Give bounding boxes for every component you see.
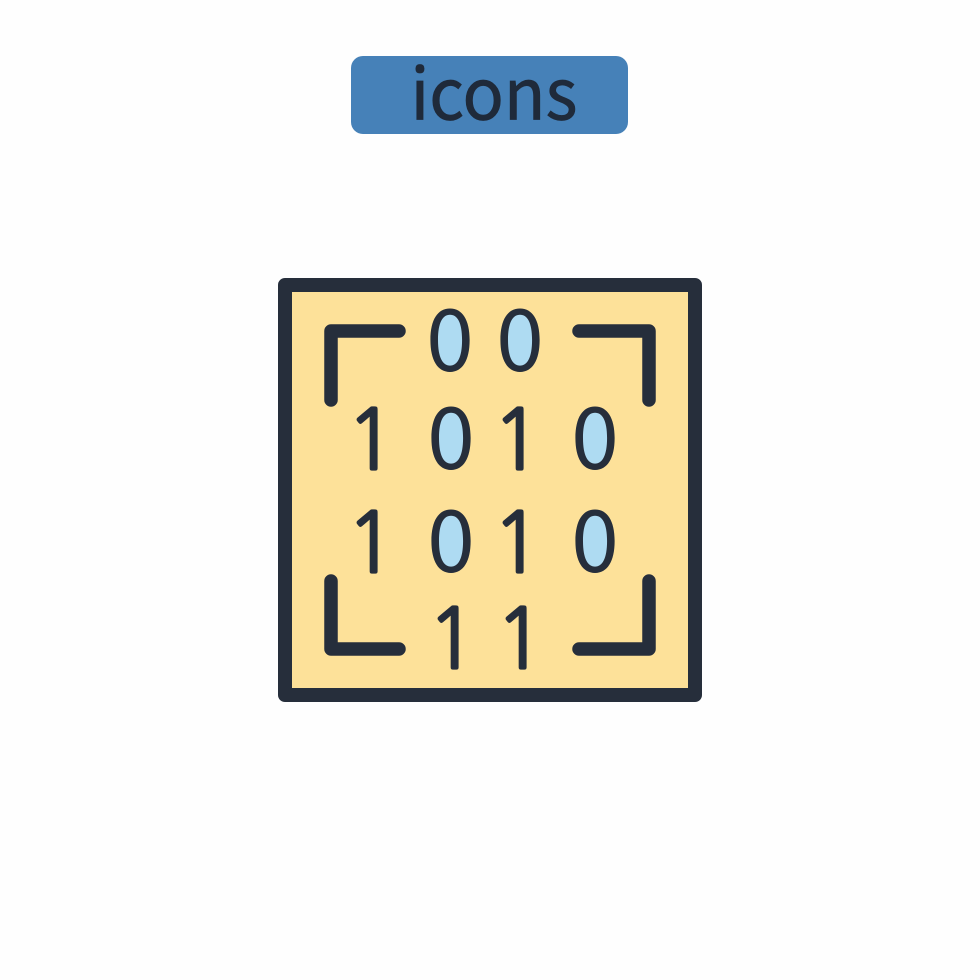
binary digits row 1: 0 [496,271,544,396]
binary digits row 1: 0 [426,271,474,396]
binary digits row 4 [427,598,545,680]
icon: binary code in a square frame [285,271,695,695]
binary digits row 2 [346,369,619,494]
binary digits row 2: 0 [427,369,475,494]
binary digits row 4: 1 [427,598,477,680]
zero fills [434,312,611,569]
binary digits row 3: 0 [427,472,475,597]
badge title text: icons [410,38,578,140]
badge background [351,56,628,134]
binary digits row 4: 1 [495,598,545,680]
binary digits row 3: 1 [346,502,396,584]
binary digits row 3: 0 [571,472,619,597]
binary digits row 2: 0 [571,369,619,494]
binary digits row 3: 1 [492,502,542,584]
binary digits row 2: 1 [492,398,542,482]
corner brackets [331,331,649,649]
binary digits row 3 [346,472,619,597]
binary digits row 1 [426,271,544,396]
title badge [351,38,628,140]
icon frame [285,285,695,695]
binary digits row 2: 1 [346,398,396,482]
